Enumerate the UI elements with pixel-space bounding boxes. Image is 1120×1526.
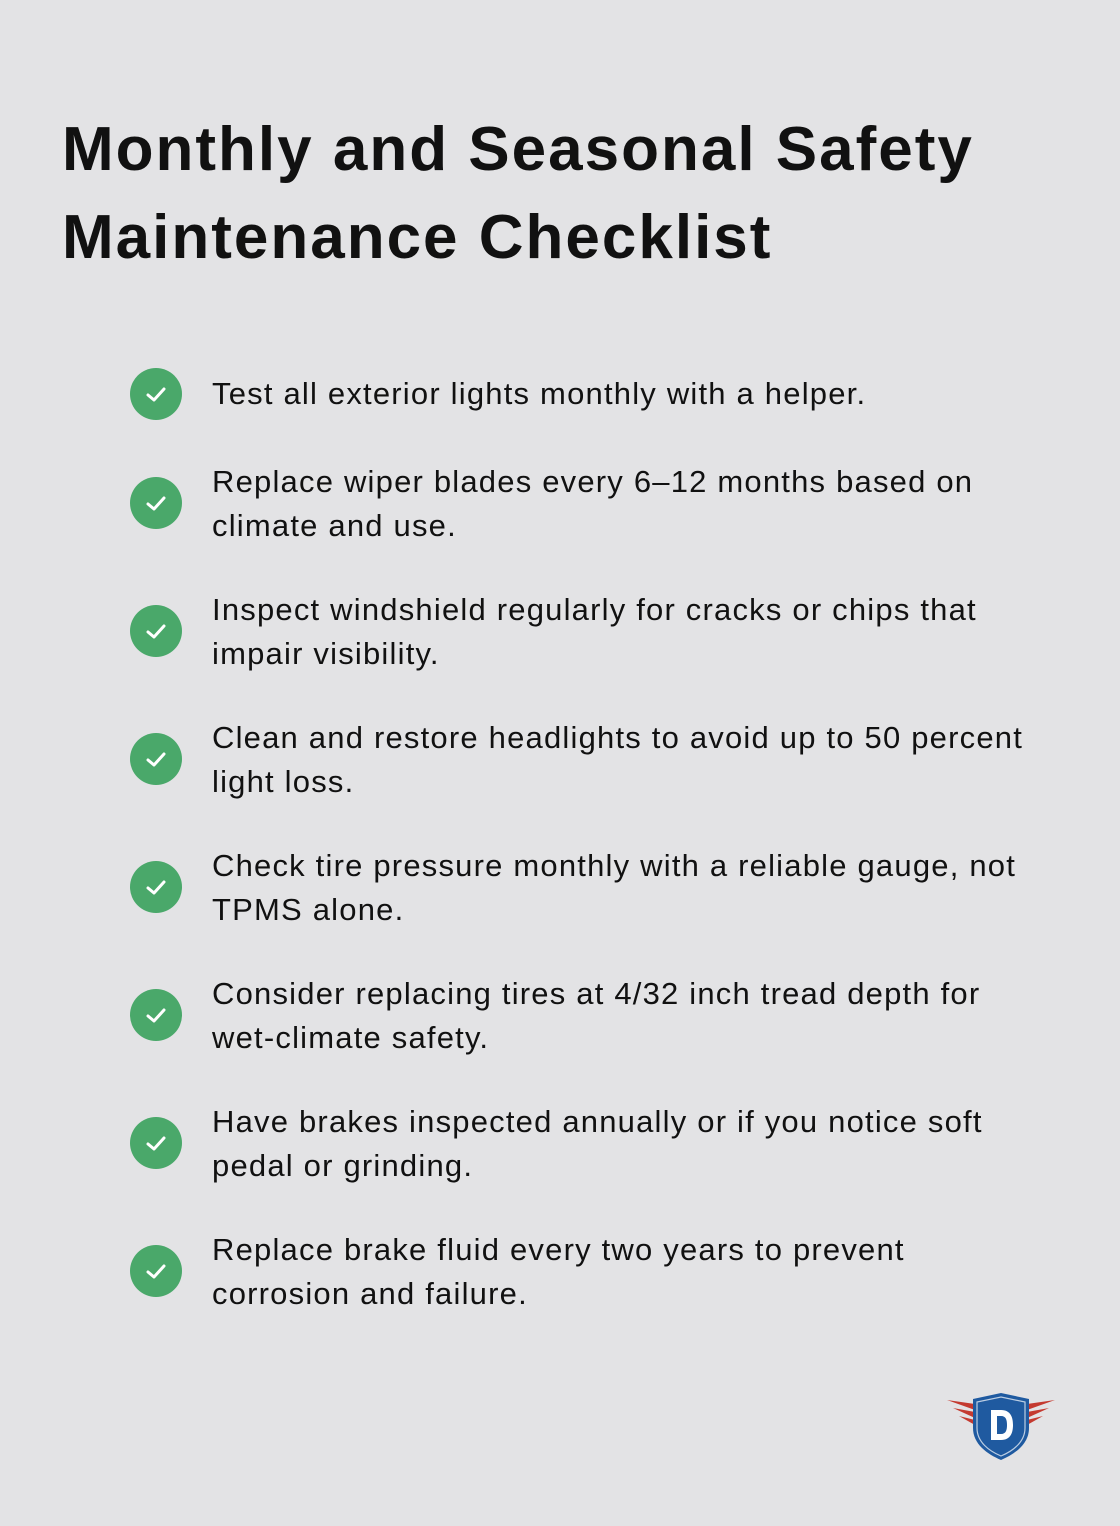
checklist item 5 bbox=[130, 848, 1016, 927]
checklist item 2: climate and use. bbox=[212, 508, 457, 543]
checklist item 3: Inspect windshield regularly for cracks or chips that bbox=[212, 592, 977, 627]
title: Maintenance Checklist bbox=[62, 203, 772, 272]
icon: check bbox=[130, 605, 182, 657]
checklist item 7: Have brakes inspected annually or if you notice soft bbox=[212, 1104, 983, 1139]
icon: check bbox=[130, 733, 182, 785]
checklist item 8: corrosion and failure. bbox=[212, 1276, 528, 1311]
checklist item 5: Check tire pressure monthly with a reliable gauge, not bbox=[212, 848, 1016, 883]
checklist item 3 bbox=[130, 592, 977, 671]
logo: winged shield bbox=[947, 1393, 1055, 1460]
title bbox=[62, 115, 974, 272]
checklist item 6 bbox=[130, 976, 980, 1055]
checklist item 7 bbox=[130, 1104, 983, 1183]
icon: check bbox=[130, 861, 182, 913]
checklist item 1: Test all exterior lights monthly with a helper. bbox=[212, 376, 866, 411]
checklist item 2: Replace wiper blades every 6–12 months based on bbox=[212, 464, 973, 499]
checklist item 8: Replace brake fluid every two years to prevent bbox=[212, 1232, 905, 1267]
checklist item 6: Consider replacing tires at 4/32 inch tread depth for bbox=[212, 976, 980, 1011]
checklist item 8 bbox=[130, 1232, 905, 1311]
checklist item 6: wet-climate safety. bbox=[212, 1020, 489, 1055]
title: Monthly and Seasonal Safety bbox=[62, 115, 974, 184]
checklist item 4 bbox=[130, 720, 1023, 799]
checklist item 1 bbox=[130, 368, 866, 420]
icon: check bbox=[130, 1117, 182, 1169]
checklist item 2 bbox=[130, 464, 973, 543]
checklist item 4: light loss. bbox=[212, 764, 354, 799]
checklist item 4: Clean and restore headlights to avoid up to 50 percent bbox=[212, 720, 1023, 755]
checklist item 5: TPMS alone. bbox=[212, 892, 404, 927]
icon: check bbox=[130, 477, 182, 529]
checklist item 7: pedal or grinding. bbox=[212, 1148, 473, 1183]
icon: check bbox=[130, 368, 182, 420]
icon: check bbox=[130, 1245, 182, 1297]
icon: check bbox=[130, 989, 182, 1041]
checklist item 3: impair visibility. bbox=[212, 636, 440, 671]
